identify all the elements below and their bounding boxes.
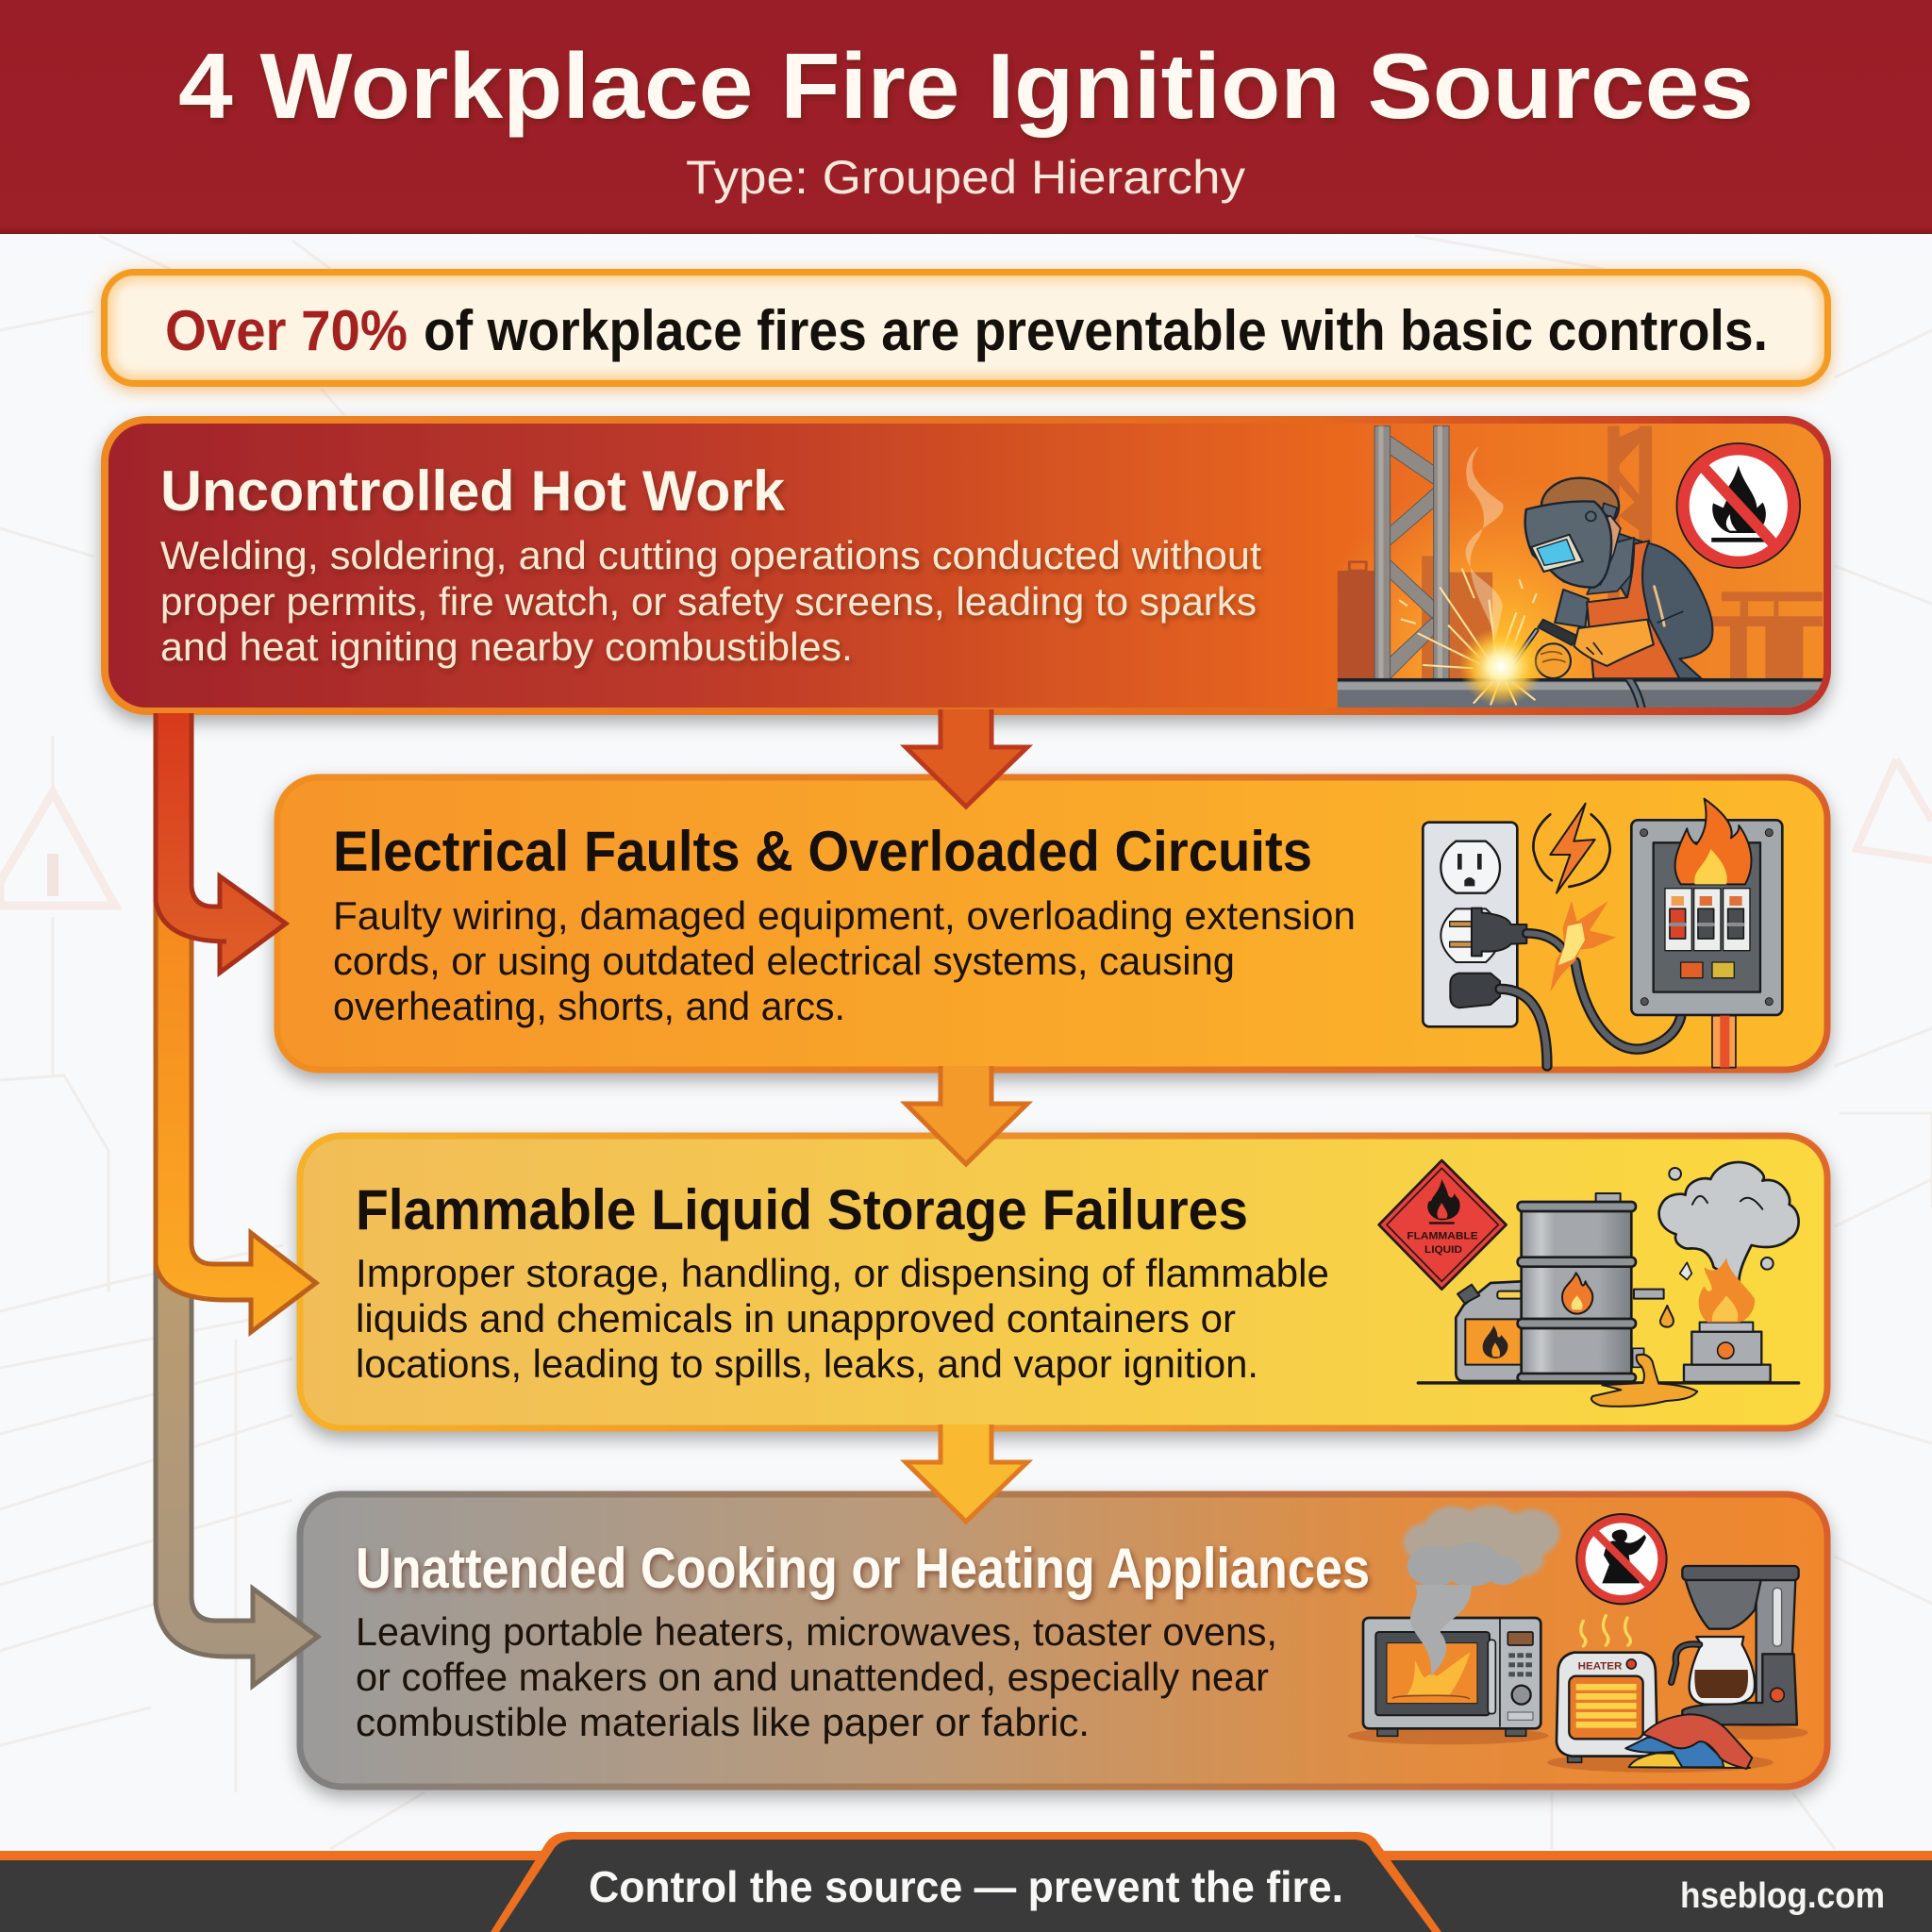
source label: hseblog.com <box>1680 1876 1885 1916</box>
sparks <box>1400 569 1537 705</box>
footer bar <box>0 1832 1932 1932</box>
card 3 description: locations, leading to spills, leaks, and vapor ignition. <box>356 1341 1258 1386</box>
valve and puddle <box>1633 1348 1644 1367</box>
smoke plume <box>1407 1542 1522 1676</box>
microwave <box>1377 1728 1398 1736</box>
title: 4 Workplace Fire Ignition Sources <box>178 34 1754 138</box>
arrow: side connector to card 4 <box>156 1264 318 1686</box>
steam <box>1581 1616 1630 1646</box>
heater <box>1568 1755 1582 1762</box>
card 2 description: Faulty wiring, damaged equipment, overloading extension <box>333 893 1356 938</box>
arrow: card 3 to card 4 <box>906 1424 1027 1522</box>
callout inner glow <box>108 275 1824 380</box>
jerry can <box>1456 1281 1522 1381</box>
no flame sign <box>1683 449 1794 562</box>
callout highlight: Over 70% <box>165 299 408 362</box>
card 3 heading: Flammable Liquid Storage Failures <box>356 1178 1248 1241</box>
panel: electrical faults <box>277 777 1827 1070</box>
stove <box>1684 1365 1771 1382</box>
card 4 heading: Unattended Cooking or Heating Appliances <box>356 1537 1370 1600</box>
illustration: outlet and breaker panel <box>1423 799 1782 1068</box>
card 2 description: cords, or using outdated electrical systems, causing <box>333 939 1235 983</box>
card 1 description <box>160 533 1261 669</box>
breaker panel <box>1631 820 1782 1015</box>
illustration: barrel, can, hazard sign: FLAMMABLE <box>1407 1230 1478 1241</box>
card 3 description <box>356 1251 1329 1386</box>
card 4 description <box>356 1609 1277 1744</box>
arrow: side connector to card 2 <box>156 713 286 973</box>
card 3 body <box>300 1136 1827 1428</box>
vapor cloud <box>1659 1162 1799 1283</box>
callout: 70% preventable <box>105 273 1827 383</box>
card 3 description: Improper storage, handling, or dispensing of flammable <box>356 1251 1329 1295</box>
panel: uncontrolled hot work <box>105 418 1827 711</box>
arrow: card 2 to card 3 <box>906 1066 1027 1164</box>
card 1 description: proper permits, fire watch, or safety screens, leading to sparks <box>160 579 1257 624</box>
subtitle: Type: Grouped Hierarchy <box>686 151 1245 204</box>
welder body <box>1617 533 1712 678</box>
header banner <box>0 0 1932 234</box>
spigot and drop <box>1634 1290 1664 1299</box>
card 3 description: liquids and chemicals in unapproved containers or <box>356 1296 1236 1341</box>
illustration: microwave, heater, coffee maker: HEATER <box>1578 1660 1622 1672</box>
footer tagline: Control the source — prevent the fire. <box>589 1862 1343 1911</box>
card 1 description: Welding, soldering, and cutting operations conducted without <box>160 533 1261 577</box>
card 4 description: or coffee makers on and unattended, especially near <box>356 1655 1269 1699</box>
card 1 heading: Uncontrolled Hot Work <box>160 459 786 523</box>
no person sign <box>1581 1519 1662 1599</box>
barrel <box>1596 1193 1621 1203</box>
floor <box>1338 679 1826 708</box>
card 4 description: Leaving portable heaters, microwaves, toaster ovens, <box>356 1609 1277 1654</box>
helmet <box>1540 477 1621 521</box>
card 4 description: combustible materials like paper or fabric. <box>356 1700 1090 1744</box>
card 1 description: and heat igniting nearby combustibles. <box>160 625 853 669</box>
card 2 heading: Electrical Faults & Overloaded Circuits <box>333 820 1312 883</box>
panel: unattended cooking or heating appliances <box>300 1494 1827 1787</box>
ground line <box>1418 1378 1799 1388</box>
arrow: side connector to card 3 <box>156 901 316 1332</box>
flame <box>1699 1257 1755 1323</box>
card 2 description: overheating, shorts, and arcs. <box>333 984 845 1028</box>
panel: flammable liquid storage <box>300 1136 1827 1428</box>
illustration: welder at work <box>1338 418 1826 708</box>
arrow: card 1 to card 2 <box>906 709 1027 807</box>
illustration: microwave, heater, coffee maker <box>1347 1506 1808 1773</box>
coffee maker <box>1757 1580 1795 1712</box>
gloves and torch <box>1538 620 1579 645</box>
illustration: barrel, can, hazard sign: LIQUID <box>1424 1244 1462 1256</box>
bubbles <box>1669 1168 1681 1180</box>
illustration: barrel, can, hazard sign <box>1379 1160 1799 1407</box>
card 2 description <box>333 893 1356 1028</box>
pile of fabric <box>1629 1753 1750 1768</box>
smoke cloud <box>1404 1506 1559 1577</box>
card 2 body <box>277 777 1827 1070</box>
card 1 body <box>105 420 1827 711</box>
footer tab <box>491 1832 1441 1932</box>
callout text: of workplace fires are preventable with basic controls. <box>424 299 1768 362</box>
hose <box>1625 681 1646 708</box>
card 4 body <box>300 1494 1827 1787</box>
